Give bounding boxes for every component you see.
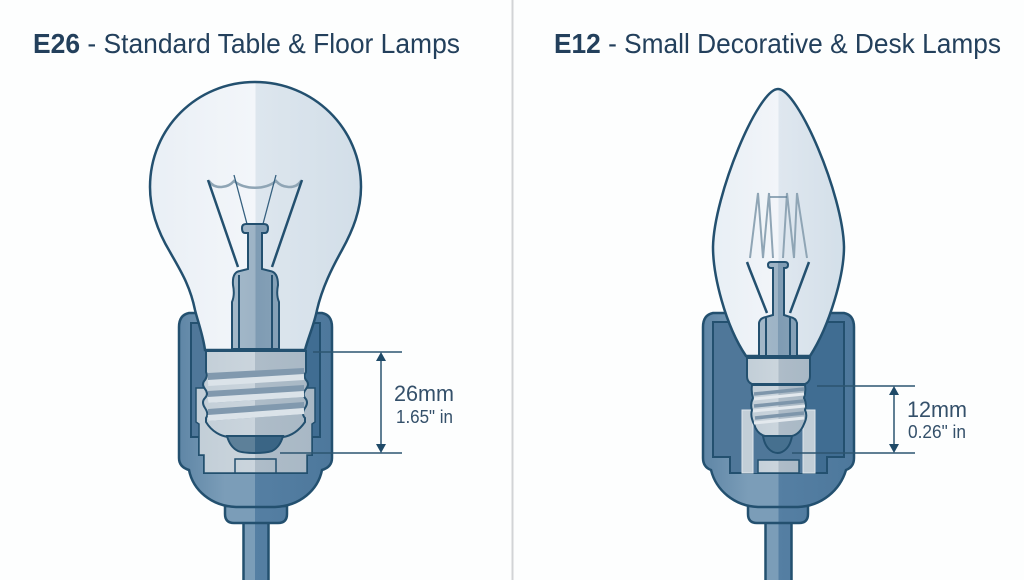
icon: E26 glass stem — [232, 224, 279, 349]
icon: E12 socket cavity — [713, 322, 844, 473]
heading: E12: E12 - Small Decorative & Desk Lamps — [554, 28, 1001, 59]
icon: E26 ceramic insert — [196, 388, 315, 473]
icon: E26 socket collar — [225, 506, 287, 523]
dimension: E26 26mm — [280, 352, 454, 453]
icon: E26 filament and supports — [208, 175, 302, 267]
icon: E26 contact — [235, 459, 276, 473]
dimension: E12 12mm: 0.26" in — [908, 422, 966, 442]
panel: E12 bulb — [554, 28, 1001, 580]
icon: E26 socket shell — [179, 313, 332, 507]
icon: E26 socket cavity — [191, 323, 320, 473]
icon: E26 screw base — [203, 351, 308, 453]
icon: E26 power cord — [244, 522, 268, 580]
dimension: E12 12mm — [792, 386, 967, 453]
icon: E26 glass bulb — [150, 82, 361, 350]
icon: E12 socket collar — [748, 505, 808, 523]
icon: E12 ceramic insert — [742, 410, 815, 473]
icon: E12 glass bulb — [713, 89, 844, 356]
icon: E12 socket shell — [703, 313, 854, 507]
heading: E26: E26 - Standard Table & Floor Lamps — [33, 28, 460, 59]
panel: E26 bulb — [33, 28, 460, 580]
icon: E12 screw base — [747, 358, 810, 453]
icon: E12 glass stem — [759, 262, 797, 356]
dimension: E26 26mm: 26mm — [394, 381, 454, 406]
dimension: E26 26mm: 1.65" in — [396, 407, 453, 427]
icon: E12 power cord — [766, 522, 792, 580]
dimension: E12 12mm: 12mm — [907, 397, 967, 422]
icon: E12 filament and supports — [747, 193, 809, 313]
